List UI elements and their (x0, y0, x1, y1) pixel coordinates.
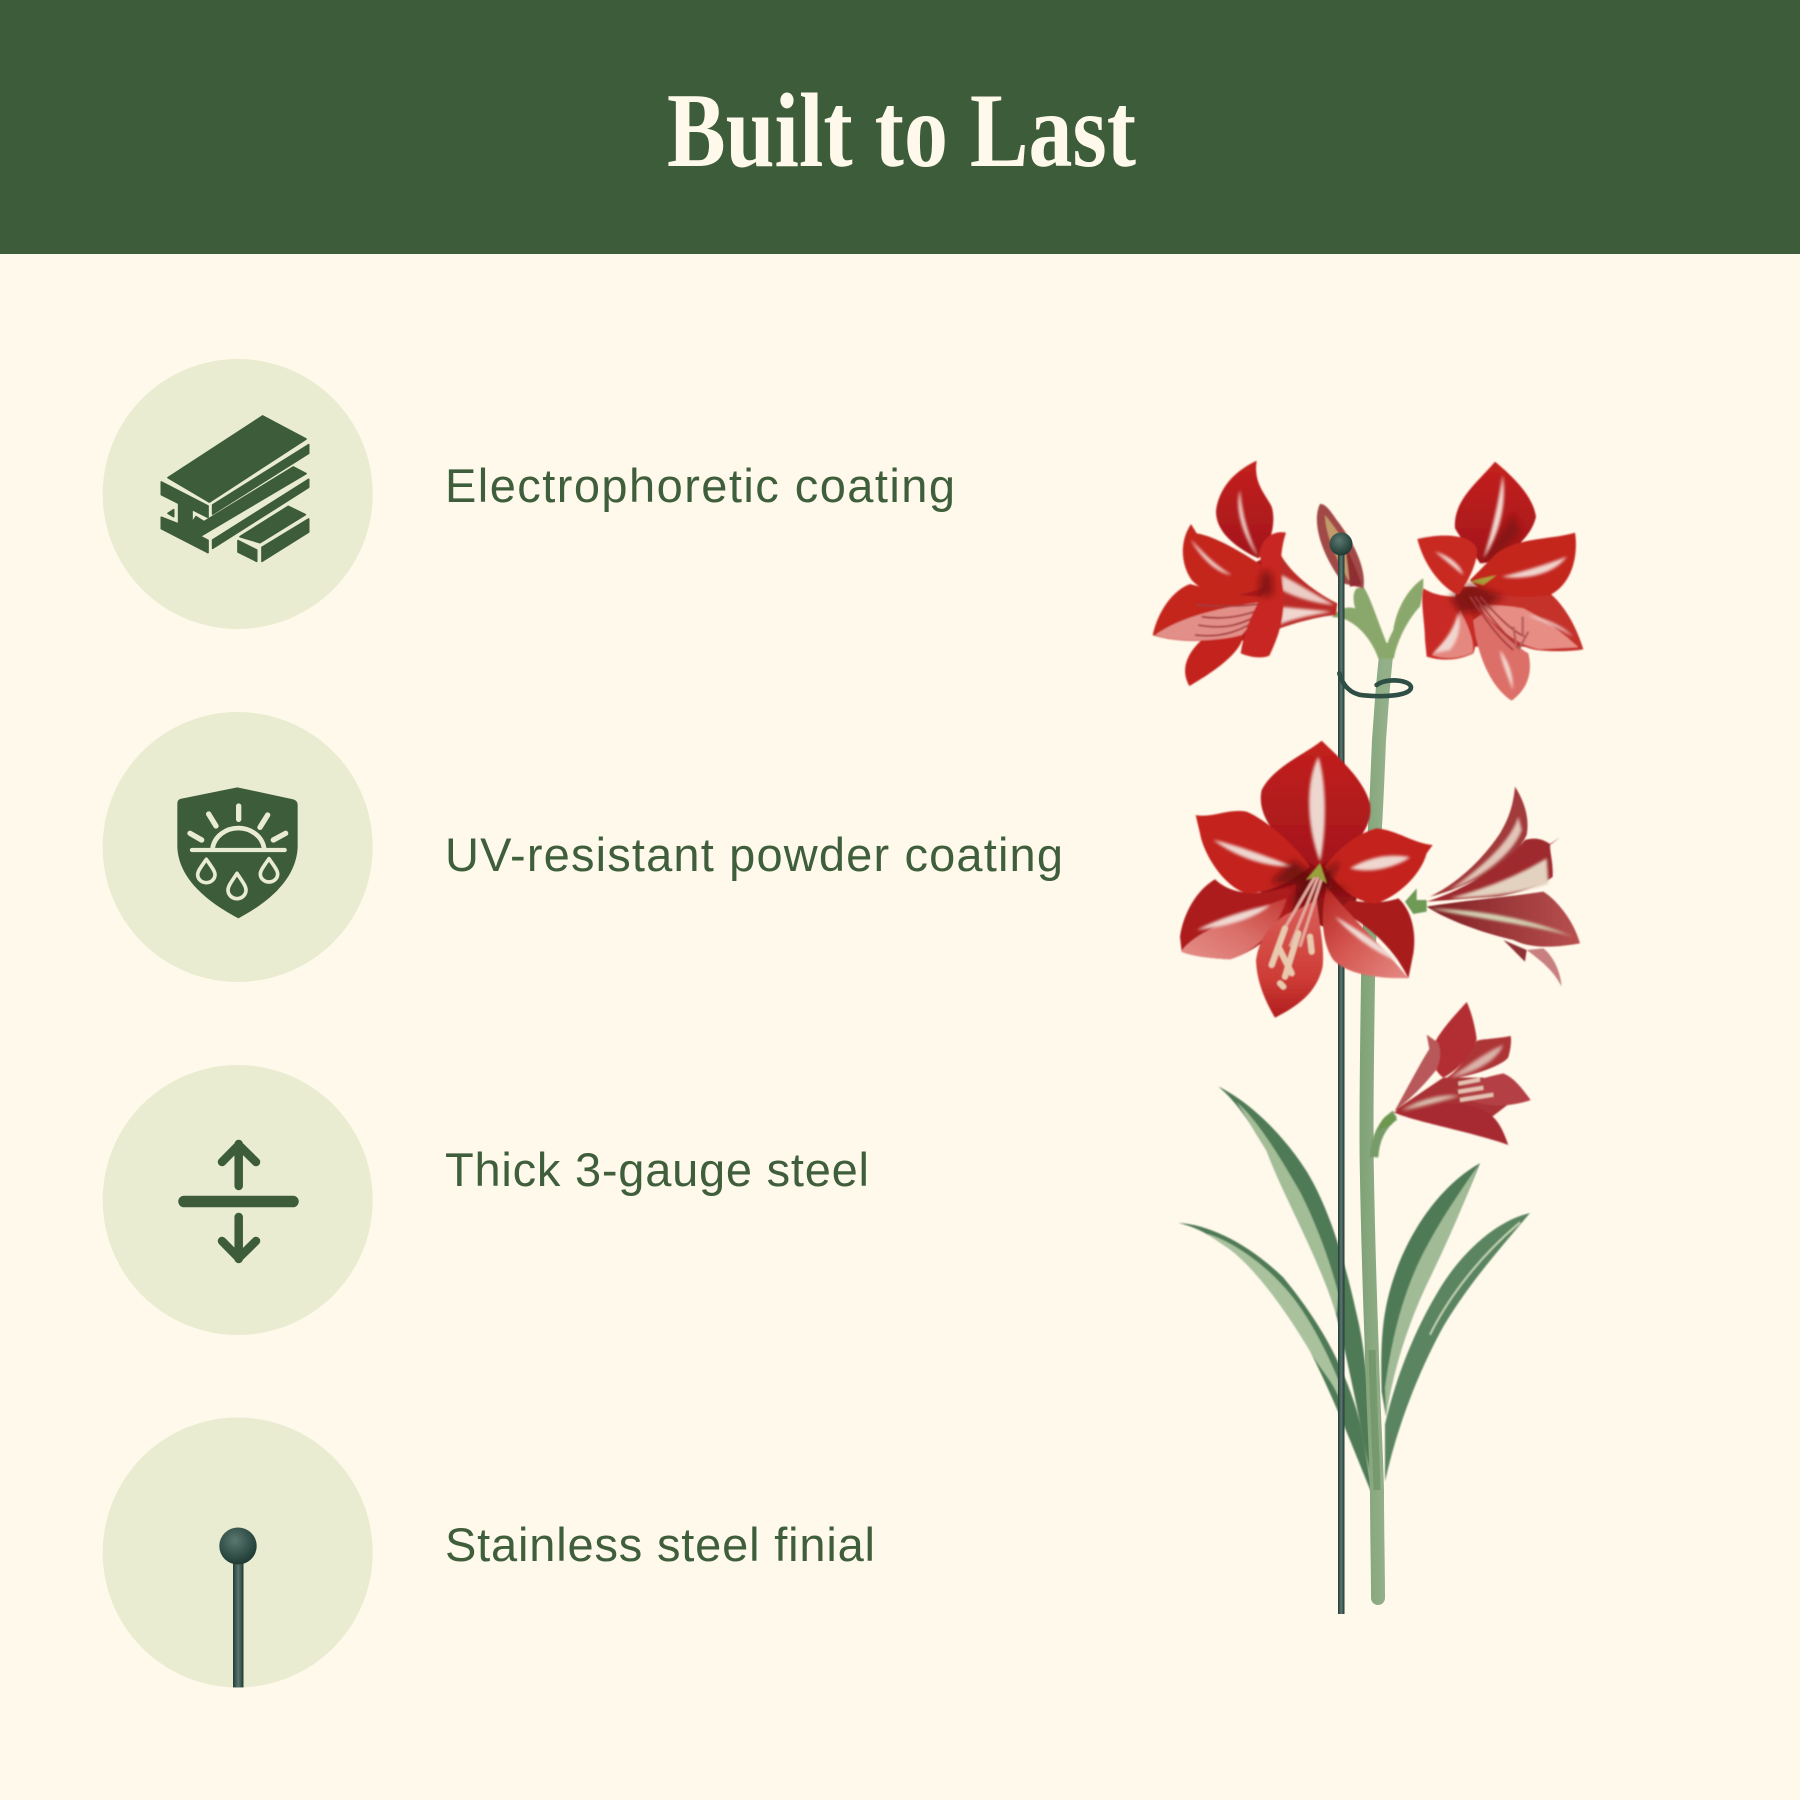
side flower (1405, 787, 1580, 987)
top-left flower (1153, 461, 1337, 686)
plant stake with finial (1330, 532, 1411, 1614)
illustration: amaryllis with plant stake (1153, 461, 1583, 1614)
right front petal (1241, 532, 1286, 657)
top petal (1216, 461, 1273, 558)
stem (1366, 650, 1387, 1598)
left lower petal (1422, 588, 1476, 660)
flower bud (1317, 504, 1364, 588)
petal underlay (1260, 853, 1357, 927)
top petal (1261, 741, 1370, 867)
top-right flower (1417, 462, 1583, 701)
bottom petal (1256, 900, 1323, 1018)
petal underlay (1450, 587, 1543, 647)
green centre (1306, 863, 1327, 883)
icon circle: thickness arrows (103, 1065, 373, 1335)
icon circle: steel beams (103, 359, 373, 629)
dark throat (1450, 583, 1503, 613)
stem branches and green buds (1332, 578, 1423, 658)
large front flower (1180, 741, 1433, 1018)
lower left petal (1153, 584, 1265, 641)
icon circle: shield with sun and rain (103, 712, 373, 982)
stamens (1470, 597, 1525, 650)
right upper petal (1470, 533, 1576, 597)
lower left petal (1180, 879, 1297, 959)
label: UV-resistant powder coating (445, 828, 1063, 881)
label: Thick 3-gauge steel (445, 1143, 869, 1196)
leaves (1178, 1087, 1530, 1496)
label: Stainless steel finial (445, 1518, 875, 1571)
top petal (1455, 462, 1536, 563)
label: Electrophoretic coating (445, 459, 955, 512)
left upper petal (1183, 524, 1267, 595)
bottom petal (1473, 613, 1530, 701)
right petal (1325, 828, 1433, 903)
right lower petal (1467, 588, 1583, 651)
icon circle: finial (103, 1418, 373, 1690)
feature 1: electrophoretic coating (103, 359, 955, 629)
stamens (1282, 877, 1322, 947)
bottom petal (1185, 632, 1243, 686)
feature 3: thick 3-gauge steel (103, 1065, 869, 1335)
left front petal (1417, 536, 1477, 595)
feature 2: UV-resistant powder coating (103, 712, 1063, 982)
lower right petal (1337, 898, 1414, 978)
header band (0, 0, 1800, 254)
small lower flower (1374, 1002, 1531, 1157)
dark throat (1270, 860, 1353, 907)
stamens (1195, 603, 1263, 636)
support ring (1339, 673, 1411, 696)
feature 4: stainless steel finial (103, 1418, 875, 1690)
flower tube (1273, 553, 1337, 631)
left petal (1196, 811, 1310, 893)
petal underlay (1213, 557, 1280, 647)
title: Built to Last (667, 72, 1136, 189)
